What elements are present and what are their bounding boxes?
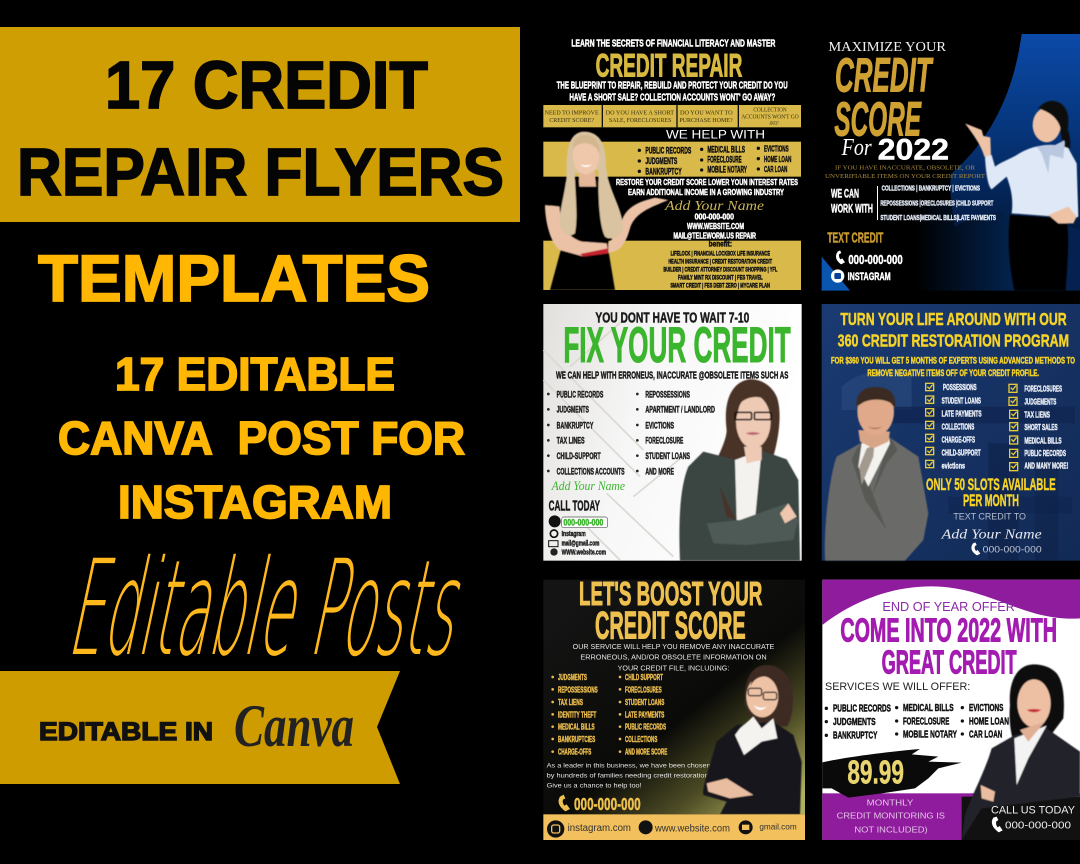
panel: flyer 4 credit restoration program: 000-000-000 <box>983 544 1042 554</box>
panel: flyer 2 maximize credit score <box>822 34 1080 291</box>
panel: flyer 1 credit repair: CREDIT SCORE? <box>549 117 594 124</box>
panel: flyer 5 boost your credit score <box>543 576 805 840</box>
panel: flyer 5 boost your credit score: Give us a chance to help too! <box>547 782 642 789</box>
panel: flyer 1 credit repair: FAMILY MINT RX DISCOUNT | FES TRAVEL <box>678 275 763 282</box>
panel: flyer 2 maximize credit score: STUDENT LOANS|MEDICAL BILLS|LATE PAYMENTS <box>880 213 996 222</box>
panel: flyer 3 fix your credit: WWW.website.com <box>562 548 606 557</box>
panel: flyer 1 credit repair: WWW.WEBSITE.COM <box>687 222 744 231</box>
panel: flyer 6 come into 2022: HOME LOAN <box>969 716 1009 727</box>
panel: flyer 4 credit restoration program: Add Your Name <box>941 527 1042 542</box>
panel: flyer 5 boost your credit score: gmail.com <box>759 822 797 832</box>
text block: editable canva post: 17 EDITABLE <box>115 348 395 400</box>
panel: flyer 2 maximize credit score: WORK WITH <box>831 201 873 215</box>
panel: flyer 1 credit repair: SMART CREDIT | FES DEBT ZERO | MYCARE PLAN <box>670 282 770 289</box>
panel: flyer 5 boost your credit score: REPOSSESSIONS <box>558 684 598 694</box>
panel: flyer 6 come into 2022: PUBLIC RECORDS <box>833 704 891 715</box>
panel: flyer 2 maximize credit score: COLLECTIONS | BANKRUPTCY | EVICTIONS <box>882 184 980 193</box>
panel: flyer 3 fix your credit: APARTMENT / LANDLORD <box>645 405 715 415</box>
panel: flyer 1 credit repair: MEDICAL BILLS <box>707 145 745 155</box>
panel: flyer 6 come into 2022: BANKRUPTCY <box>833 730 878 741</box>
figure: woman with glasses <box>679 379 800 561</box>
text block: editable canva post: CANVA POST FOR <box>58 412 465 464</box>
checklists: CHARGE-OFFS <box>942 434 975 444</box>
panel: flyer 2 maximize credit score: CREDIT <box>835 49 934 103</box>
panel: flyer 3 fix your credit: WE CAN HELP WITH ERRONEUS, INACCURATE @OBSOLETE ITEMS SUCH AS <box>556 371 789 382</box>
panel: flyer 5 boost your credit score: AND MORE SCORE <box>625 747 668 757</box>
panel: flyer 1 credit repair: CREDIT REPAIR <box>596 47 742 84</box>
panel: flyer 1 credit repair: DO YOU HAVE A SHORT <box>606 109 674 116</box>
panel: flyer 1 credit repair: ACCOUNTS WON'T GO <box>741 114 799 120</box>
panel: flyer 6 come into 2022: NOT INCLUDED) <box>854 824 928 834</box>
panel: flyer 3 fix your credit: PUBLIC RECORDS <box>557 389 603 399</box>
text block: editable canva post: INSTAGRAM <box>118 476 392 528</box>
panel: flyer 1 credit repair: PUBLIC RECORDS <box>645 145 691 155</box>
panel: flyer 5 boost your credit score: FORECLOSURES <box>625 684 662 694</box>
panel: flyer 2 maximize credit score: SCORE <box>834 92 922 146</box>
figure: woman in white shirt <box>965 101 1078 291</box>
panel: flyer 1 credit repair: LIFELOCK | FINANCIAL LOCKBOX LIFE INSURANCE <box>671 251 770 258</box>
panel: flyer 5 boost your credit score: CREDIT SCORE <box>595 603 746 647</box>
panel: flyer 5 boost your credit score: instagram.com <box>568 823 631 834</box>
panel: flyer 2 maximize credit score: For <box>841 135 872 161</box>
panel: flyer 3 fix your credit: YOU DONT HAVE TO WAIT 7-10 <box>595 310 749 326</box>
panel: flyer 1 credit repair: Add Your Name <box>664 199 764 214</box>
panel: flyer 3 fix your credit: FORECLOSURE <box>645 436 683 446</box>
panel: flyer 6 come into 2022 <box>822 580 1080 840</box>
panel: flyer 3 fix your credit: CALL TODAY <box>549 499 600 515</box>
panel: flyer 1 credit repair <box>543 35 802 291</box>
panel: flyer 3 fix your credit: BANKRUPTCY <box>557 420 594 430</box>
checklists: POSSESSIONS <box>943 382 977 392</box>
panel: flyer 6 come into 2022: 89.99 <box>847 754 904 791</box>
checklists: COLLECTIONS <box>942 421 974 431</box>
panel: flyer 2 maximize credit score: UNVERIFIABLE ITEMS ON YOUR CREDIT REPORT <box>825 174 985 180</box>
panel: flyer 1 credit repair: 000-000-000 <box>695 213 734 222</box>
panel: flyer 5 boost your credit score: As a leader in this business, we have been chosen <box>547 762 711 769</box>
panel: flyer 4 credit restoration program: TEXT CREDIT TO <box>953 511 1026 521</box>
panel: flyer 6 come into 2022: END OF YEAR OFFER <box>882 600 1015 614</box>
panel: flyer 5 boost your credit score: LET'S BOOST YOUR <box>579 576 762 613</box>
title line 2: REPAIR FLYERS <box>17 135 504 210</box>
panel: flyer 1 credit repair: RESTORE YOUR CREDIT SCORE LOWER YOUN INTEREST RATES <box>616 177 798 187</box>
panel: flyer 5 boost your credit score: BANKRUPTCIES <box>558 734 596 744</box>
panel: flyer 6 come into 2022: 000-000-000 <box>1005 820 1072 831</box>
checklists: TAX LIENS <box>1024 409 1050 419</box>
panel: flyer 1 credit repair: THE BLUEPRINT TO REPAIR, REBUILD AND PROTECT YOUR CREDIT DO YOU <box>557 80 788 91</box>
panel: flyer 3 fix your credit <box>543 304 802 561</box>
panel: flyer 6 come into 2022: CREDIT MONITORING IS <box>837 811 945 821</box>
panel: flyer 3 fix your credit: REPOSSESSIONS <box>645 389 690 399</box>
panel: flyer 1 credit repair: COLLECTION <box>753 107 787 113</box>
figure: woman in dark suit <box>962 664 1080 840</box>
panel: flyer 3 fix your credit: FIX YOUR CREDIT <box>563 317 791 373</box>
panel: flyer 5 boost your credit score: by hundreds of families needing credit restoration. <box>547 772 711 779</box>
panel: flyer 6 come into 2022: EVICTIONS <box>969 703 1004 714</box>
panel: flyer 6 come into 2022: FORECLOSURE <box>903 716 950 727</box>
panel: flyer 2 maximize credit score: MAXIMIZE YOUR <box>828 39 946 54</box>
panel: flyer 1 credit repair: SALE, FORECLOSURES <box>609 117 672 124</box>
panel: flyer 1 credit repair: JUDGMENTS <box>645 156 677 166</box>
figure: blonde woman <box>545 132 668 290</box>
panel: flyer 5 boost your credit score: JUDGMENTS <box>558 672 587 682</box>
text: Editable Posts <box>59 532 477 686</box>
panel: flyer 2 maximize credit score: IF YOU HAVE INACCURATE, OBSOLETE, OR <box>835 165 975 171</box>
panel: flyer 5 boost your credit score: OUR SERVICE WILL HELP YOU REMOVE ANY INACCURATE <box>573 642 774 651</box>
panel: flyer 3 fix your credit: JUDGMENTS <box>557 405 589 415</box>
panel: flyer 1 credit repair: LEARN THE SECRETS OF FINANCIAL LITERACY AND MASTER <box>571 39 775 50</box>
panel: flyer 1 credit repair: FORECLOSURE <box>707 155 742 165</box>
panel: flyer 2 maximize credit score: TEXT CREDIT <box>827 231 883 247</box>
title line 1: 17 CREDIT <box>105 48 428 123</box>
panel: flyer 1 credit repair: CAR LOAN <box>764 164 787 174</box>
checklists <box>926 382 1068 471</box>
panel: flyer 2 maximize credit score: 2022 <box>878 134 949 167</box>
panel: title banner <box>0 27 520 222</box>
panel: flyer 6 come into 2022: CALL US TODAY <box>991 804 1075 816</box>
panel: flyer 1 credit repair: BUILDER | CREDIT ATTORNEY DISCOUNT SHOPPING | YFL <box>663 266 777 273</box>
panel: flyer 5 boost your credit score: 000-000-000 <box>574 794 641 814</box>
ribbon: editable in canva: EDITABLE IN <box>39 718 213 746</box>
panel: flyer 2 maximize credit score: WE CAN <box>831 187 859 201</box>
ribbon: editable in canva <box>0 671 400 784</box>
panel: flyer 3 fix your credit: STUDENT LOANS <box>645 451 690 461</box>
panel: flyer 1 credit repair: EVICTIONS <box>764 144 789 154</box>
panel: flyer 1 credit repair: WE HELP WITH <box>666 127 765 141</box>
panel: flyer 4 credit restoration program <box>822 304 1080 561</box>
panel: flyer 2 maximize credit score: REPOSSESSIONS |ORECLOSURES |CHILD SUPPORT <box>880 198 994 207</box>
panel: flyer 6 come into 2022: MONTHLY <box>867 798 914 808</box>
panel: flyer 5 boost your credit score: MEDICAL BILLS <box>558 722 595 732</box>
panel: flyer 1 credit repair: EARN ADDITIONAL INCOME IN A GROWING INDUSTRY <box>628 187 784 197</box>
panel: flyer 1 credit repair: PURCHASE HOME? <box>679 117 733 124</box>
panel: flyer 2 maximize credit score: 000-000-000 <box>848 253 903 267</box>
panel: flyer 5 boost your credit score: STUDENT LOANS <box>625 697 665 707</box>
panel: flyer 3 fix your credit: Add Your Name <box>551 479 625 493</box>
panel: flyer 5 boost your credit score: ERRONEOUS, AND/OR OBSOLETE INFORMATION ON <box>580 653 767 662</box>
panel: flyer 1 credit repair: NEED TO IMPROVE <box>545 109 599 116</box>
heading: templates: TEMPLATES <box>38 241 430 315</box>
panel: flyer 1 credit repair: DO YOU WANT TO <box>680 109 733 116</box>
panel: flyer 6 come into 2022: MOBILE NOTARY <box>903 729 957 740</box>
panel: flyer 1 credit repair: MAIL@TELEWORM.US REPAIR <box>673 232 756 241</box>
panel: flyer 5 boost your credit score: LATE PAYMENTS <box>625 709 665 719</box>
panel: flyer 1 credit repair: BANKRUPTCY <box>645 166 682 176</box>
panel: flyer 2 maximize credit score: INSTAGRAM <box>848 271 891 283</box>
ribbon: editable in canva: Canva <box>234 693 354 759</box>
panel: flyer 1 credit repair: HEALTH INSURANCE | CREDIT RESTORATION CREDIT <box>668 258 772 265</box>
checklists: CHILD-SUPPORT <box>942 448 981 458</box>
panel: flyer 6 come into 2022: MEDICAL BILLS <box>903 703 954 714</box>
panel: flyer 3 fix your credit: AND MORE <box>645 466 674 476</box>
figure: smiling woman in black jacket <box>703 665 802 814</box>
panel: flyer 6 come into 2022: CAR LOAN <box>969 729 1002 740</box>
panel: flyer 1 credit repair: HOME LOAN <box>764 154 791 164</box>
checklists: STUDENT LOANS <box>942 395 981 405</box>
panel: flyer 5 boost your credit score: IDENTITY THEFT <box>558 709 596 719</box>
panel: flyer 4 credit restoration program: PER MONTH <box>963 491 1019 510</box>
panel: flyer 5 boost your credit score: TAX LIENS <box>558 697 583 707</box>
panel: flyer 3 fix your credit: mail@gmail.com <box>562 539 600 548</box>
panel: flyer 3 fix your credit: EVICTIONS <box>645 420 674 430</box>
panel: flyer 6 come into 2022: JUDGMENTS <box>833 717 876 728</box>
panel: flyer 6 come into 2022: SERVICES WE WILL OFFER: <box>825 681 970 693</box>
panel: flyer 3 fix your credit: COLLECTIONS ACCOUNTS <box>557 466 625 476</box>
checklists: evictions <box>942 461 965 471</box>
panel: flyer 3 fix your credit: 000-000-000 <box>563 518 603 528</box>
panel: flyer 1 credit repair: benefit: <box>709 240 732 249</box>
panel: flyer 3 fix your credit: CHILD-SUPPORT <box>557 451 601 461</box>
panel: flyer 5 boost your credit score: CHILD SUPPORT <box>625 672 663 682</box>
panel: flyer 5 boost your credit score: www.website.com <box>654 824 730 835</box>
panel: flyer 1 credit repair: MOBILE NOTARY <box>707 165 747 175</box>
figure: man in grey suit <box>825 387 928 561</box>
checklists: LATE PAYMENTS <box>942 409 982 419</box>
panel: flyer 1 credit repair: AWAY? <box>769 121 779 127</box>
text block: editable canva post <box>58 348 465 528</box>
panel: flyer 5 boost your credit score: COLLECTIONS <box>625 734 658 744</box>
panel: flyer 5 boost your credit score: YOUR CREDIT FILE, INCLUDING: <box>618 663 729 672</box>
panel: flyer 5 boost your credit score: CHARGE-OFFS <box>558 747 592 757</box>
panel: flyer 5 boost your credit score: PUBLIC RECORDS <box>625 722 666 732</box>
panel: flyer 3 fix your credit: TAX LINES <box>557 436 585 446</box>
panel: flyer 1 credit repair: HAVE A SHORT SALE? COLLECTION ACCOUNTS WONT' GO AWAY? <box>569 93 775 104</box>
panel: flyer 3 fix your credit: Instagram <box>562 529 586 538</box>
